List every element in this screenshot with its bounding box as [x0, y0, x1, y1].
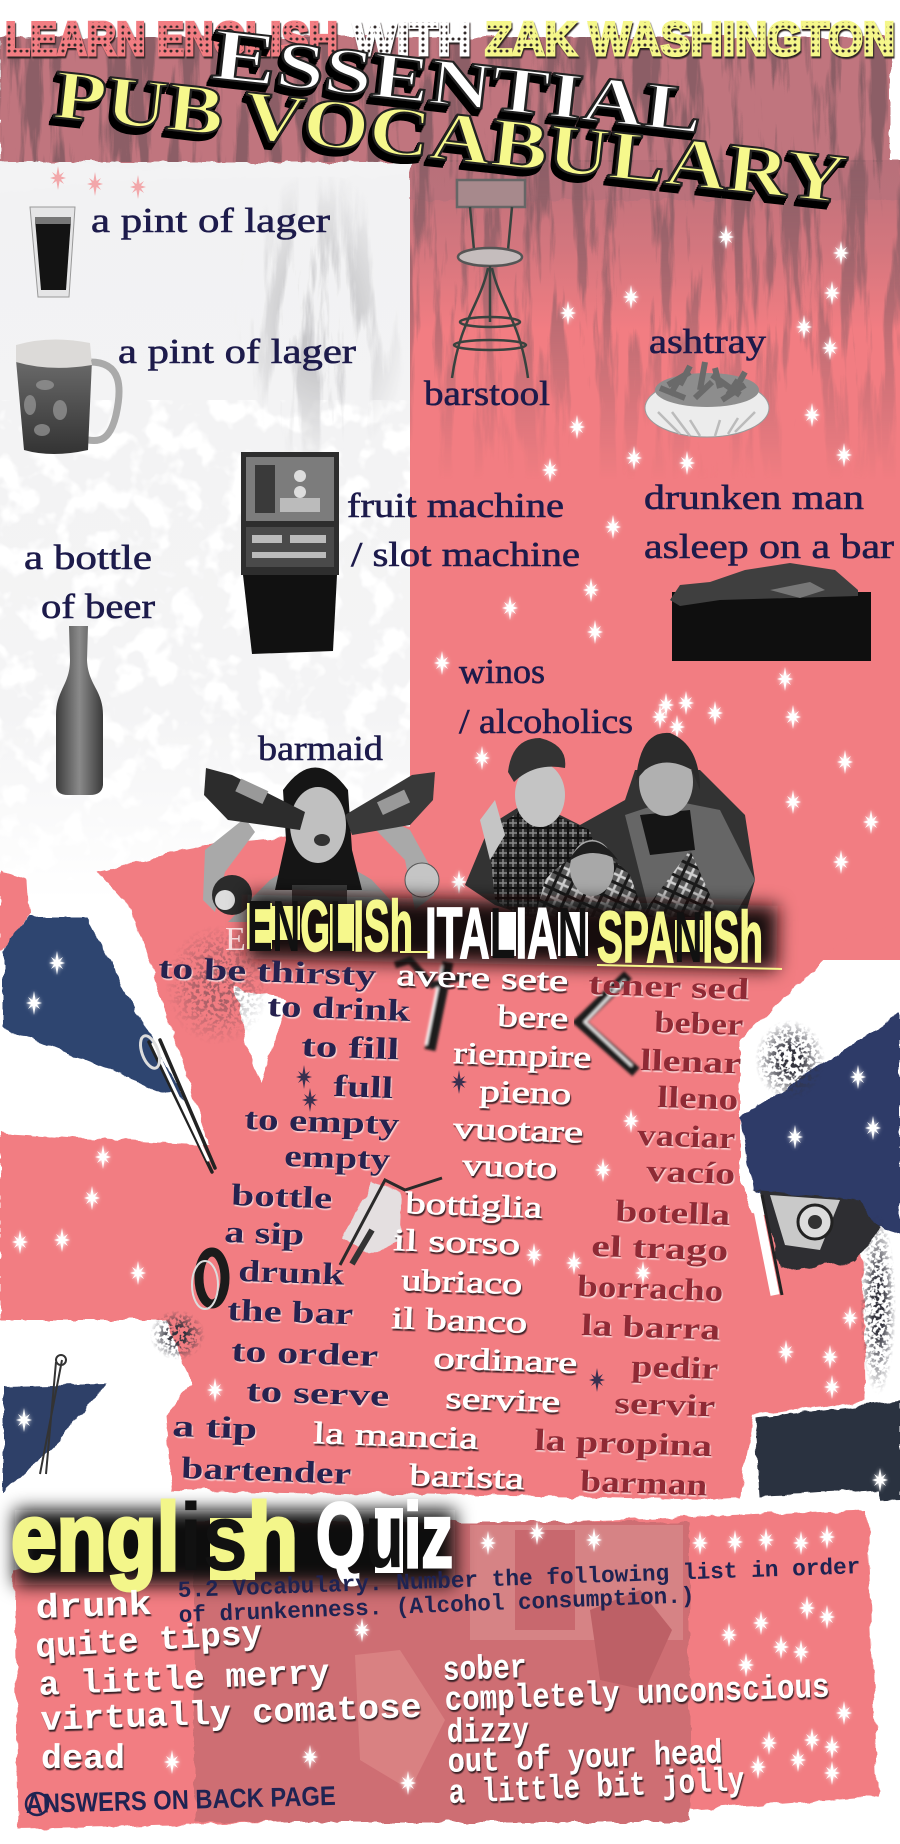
Italian word column: barista — [409, 1457, 525, 1496]
label: drunken man: drunken man — [644, 478, 864, 517]
Spanish word column: tener sed — [588, 966, 750, 1007]
Spanish word column: pedir — [631, 1348, 719, 1386]
panel: right pink column — [410, 160, 900, 960]
label: winos: winos — [459, 652, 545, 691]
Spanish word column: barman — [580, 1463, 708, 1502]
Italian word column: vuotare — [453, 1110, 584, 1150]
English word column: drunk — [238, 1253, 346, 1292]
Spanish word column: beber — [654, 1004, 744, 1042]
label: a pint of lager mug: a pint of lager — [118, 332, 356, 371]
flag: navy triangle right — [740, 1013, 900, 1235]
English word column: the bar — [227, 1292, 354, 1331]
Spanish word column: la propina — [534, 1422, 714, 1463]
heading: english quiz: english — [11, 1484, 298, 1591]
English word column — [158, 950, 412, 1491]
Italian word column — [313, 957, 592, 1496]
quiz word list: right: sober — [442, 1650, 527, 1691]
panel: header band — [0, 37, 900, 200]
safety pin: top centre — [395, 960, 470, 1050]
Spanish word column: botella — [615, 1193, 732, 1232]
safety pin: V shaped centre right — [580, 975, 636, 1072]
label: a bottle of beer: of beer — [41, 587, 155, 626]
table header: languages: E — [225, 921, 246, 958]
label: barmaid: barmaid — [258, 729, 384, 768]
Spanish word column: vaciar — [637, 1117, 736, 1155]
safety pin: diagonal with grey patch — [340, 1178, 442, 1265]
quiz word list: left: virtually comatose — [40, 1690, 422, 1741]
English word column: to order — [231, 1333, 379, 1373]
quiz word list: left: quite tipsy — [34, 1616, 263, 1668]
English word column: a tip — [172, 1408, 258, 1446]
Italian word column: bottiglia — [405, 1185, 543, 1225]
top strapline — [5, 12, 895, 65]
icon: pint glass — [30, 207, 75, 297]
Spanish word column: la barra — [581, 1307, 722, 1347]
label: fruit machine: fruit machine — [347, 486, 564, 525]
Italian word column: servire — [445, 1380, 561, 1419]
English word column: bartender — [181, 1450, 352, 1491]
heading: english quiz — [11, 1484, 455, 1591]
quiz word list: right: a little bit jolly — [448, 1763, 745, 1814]
label: winos — [459, 652, 633, 741]
Spanish word column: el trago — [591, 1228, 729, 1268]
icon: tankard — [16, 339, 119, 454]
heading: Spanish: SPANISh — [597, 898, 763, 978]
flag: white central tear — [235, 987, 287, 1082]
label: barstool: barstool — [424, 374, 550, 413]
Italian word column: la mancia — [313, 1415, 479, 1456]
heading: English: ENGLISh — [247, 887, 413, 967]
label: fruit machine: / slot machine — [351, 535, 580, 574]
icon: fruit machine — [241, 452, 339, 654]
top strapline: WITH — [353, 12, 471, 65]
Spanish word column: vacío — [646, 1153, 736, 1191]
quiz word list: left: dead — [41, 1741, 125, 1779]
instruction text: of drunkenness. (Alcohol consumption.) — [178, 1583, 695, 1629]
English word column: to be thirsty — [158, 950, 378, 993]
top strapline: LEARN ENGLISH — [5, 12, 338, 65]
English word column: to fill — [301, 1028, 400, 1066]
stars — [12, 225, 888, 1492]
Italian word column: ordinare — [433, 1340, 578, 1380]
panel: quiz background — [5, 1490, 885, 1832]
icon: drunken man on a bar — [670, 563, 871, 661]
Italian word column: vuoto — [462, 1147, 558, 1185]
label: ashtray: ashtray — [649, 322, 767, 361]
quiz word list: right: dizzy — [447, 1714, 529, 1753]
label: drunken man: asleep on a bar — [644, 527, 894, 566]
English word column: to empty — [244, 1101, 401, 1141]
safety pin: right clasp — [750, 1190, 880, 1295]
quiz word list: right: out of your head — [447, 1735, 723, 1783]
English word column: full — [333, 1068, 394, 1105]
quiz word list: left — [34, 1587, 422, 1779]
label: a pint of lager: a pint of lager — [91, 201, 330, 240]
icon: barstool — [452, 180, 528, 378]
photo: three winos — [465, 733, 755, 917]
English word column: empty — [284, 1138, 392, 1177]
English word column: to drink — [267, 988, 412, 1028]
Italian word column: pieno — [479, 1073, 572, 1111]
Italian word column: bere — [497, 998, 569, 1035]
title: essential: ESSENTIAL — [208, 13, 707, 150]
photo: barmaid with bottles — [203, 768, 439, 922]
flag: navy triangle upper left — [3, 917, 184, 1100]
Spanish word column: borracho — [577, 1268, 724, 1308]
quiz word list: left: a little merry — [38, 1655, 330, 1706]
safety pin: lower left — [40, 1355, 66, 1474]
Spanish word column — [534, 966, 750, 1502]
quiz word list: left: drunk — [35, 1587, 152, 1629]
title: pub vocabulary: PUB VOCABULARY — [50, 56, 851, 219]
English word column: bottle — [231, 1177, 333, 1216]
quiz word list: right: completely unconscious — [444, 1670, 830, 1721]
instruction text: 5.2 Vocabulary. Number the following list in order — [177, 1554, 861, 1604]
Italian word column: il banco — [391, 1300, 528, 1340]
icon: beer bottle — [56, 626, 103, 795]
icon: ashtray — [645, 362, 769, 437]
answers note: ANSWERS ON BACK PAGE — [25, 1781, 336, 1819]
panel: left pale column — [0, 160, 410, 900]
safety pin: ring — [192, 1252, 225, 1309]
label: a bottle of beer — [24, 538, 155, 626]
label: fruit machine — [347, 486, 580, 574]
flag: navy triangle lower left — [3, 1385, 105, 1493]
Italian word column: riempire — [453, 1035, 592, 1075]
heading: Italian: ITALIAN — [425, 894, 588, 974]
heading: english quiz: Quiz — [316, 1485, 453, 1587]
stars: quiz panel — [164, 1521, 852, 1795]
Spanish word column: servir — [614, 1385, 716, 1424]
Italian word column: ubriaco — [401, 1262, 523, 1301]
English word column: a sip — [224, 1214, 305, 1252]
label: winos: / alcoholics — [459, 702, 633, 741]
Italian word column: avere sete — [396, 957, 569, 998]
quiz word list: right — [442, 1650, 830, 1814]
Spanish word column: lleno — [657, 1079, 739, 1117]
Italian word column: il sorso — [393, 1222, 521, 1261]
English word column: to serve — [246, 1373, 390, 1413]
table header: languages — [225, 887, 782, 978]
safety pin: upper left — [137, 1033, 215, 1172]
label: drunken man — [644, 478, 894, 566]
label: a bottle of beer: a bottle — [24, 538, 152, 577]
instruction text — [177, 1554, 861, 1629]
flag: dark corner lower right — [755, 1400, 900, 1505]
Spanish word column: llenar — [640, 1042, 742, 1081]
flag: body pink shape — [0, 800, 900, 1500]
